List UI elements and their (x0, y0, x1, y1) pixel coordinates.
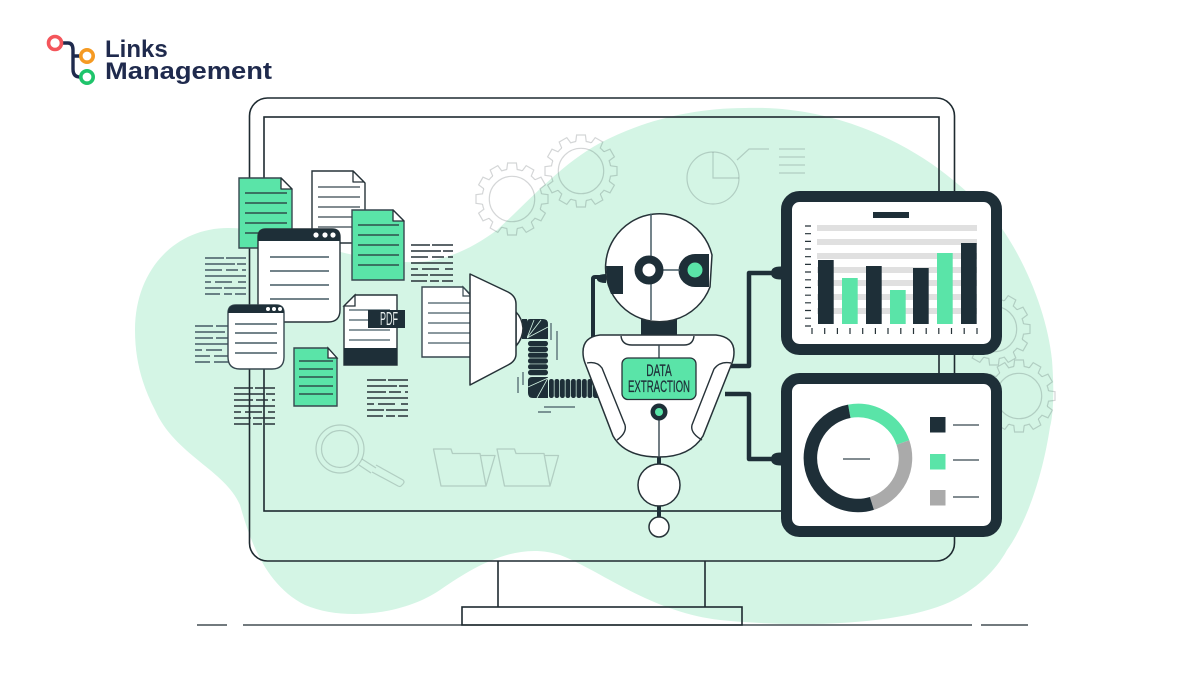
robot ear (597, 266, 623, 294)
background blob (135, 108, 1053, 624)
document: white top (312, 171, 365, 243)
motion lines (518, 323, 575, 412)
logo red node (48, 36, 62, 50)
document: green top left (239, 178, 292, 248)
document entering scanner (422, 287, 471, 357)
text lines group E (411, 245, 453, 281)
legend (930, 417, 979, 506)
icon: pie chart outline (687, 149, 805, 204)
ground line (197, 624, 1028, 626)
robot right arm (692, 363, 731, 440)
gear 4 (983, 360, 1055, 432)
wire knob top (771, 266, 782, 280)
chart title bar (873, 212, 909, 218)
logo orange node (81, 50, 93, 62)
icon: folders outline (434, 449, 558, 486)
bar chart (818, 243, 977, 324)
gear 2 (545, 135, 617, 207)
data extraction label: EXTRACTION (628, 378, 690, 396)
robot body (583, 335, 734, 457)
panel: bar chart dashboard (771, 196, 996, 350)
wire from robot ear (593, 277, 602, 337)
icon: magnifier outline (316, 425, 404, 486)
robot neck (641, 318, 677, 337)
text lines group B (195, 326, 229, 362)
logo green node (81, 71, 93, 83)
document: green right (352, 210, 404, 280)
robot lower stem and spheres (638, 456, 680, 537)
hose from scanner to robot (522, 319, 603, 398)
robot to dashboard wires (725, 273, 778, 459)
monitor (250, 98, 954, 625)
robot left arm (587, 363, 625, 440)
robot right goggle (678, 254, 709, 287)
data extraction label (622, 358, 696, 400)
browser window: large (258, 229, 340, 322)
browser window: small (228, 305, 284, 369)
chart grid bands (817, 225, 977, 314)
panel: donut chart dashboard (771, 378, 996, 532)
wire knob bottom (771, 452, 782, 466)
logo wordmark: Management (105, 58, 272, 85)
data extraction label: DATA (646, 362, 672, 380)
robot collar (621, 336, 694, 345)
gear 3 (958, 293, 1030, 365)
text lines group C (234, 388, 275, 424)
PDF document (344, 295, 405, 365)
donut chart (810, 410, 905, 506)
text lines group D (367, 380, 408, 416)
robot chest button (650, 404, 668, 420)
chart axis ticks (805, 226, 977, 334)
gear 1 (476, 163, 548, 235)
PDF document: PDF (380, 309, 398, 329)
robot left eye (638, 260, 660, 280)
logo (48, 36, 272, 85)
robot head (597, 214, 712, 322)
scanner funnel (470, 274, 523, 385)
logo wordmark: Links (105, 36, 168, 63)
text lines group A (205, 258, 246, 294)
document: green bottom (294, 348, 337, 406)
logo connector (62, 43, 80, 77)
